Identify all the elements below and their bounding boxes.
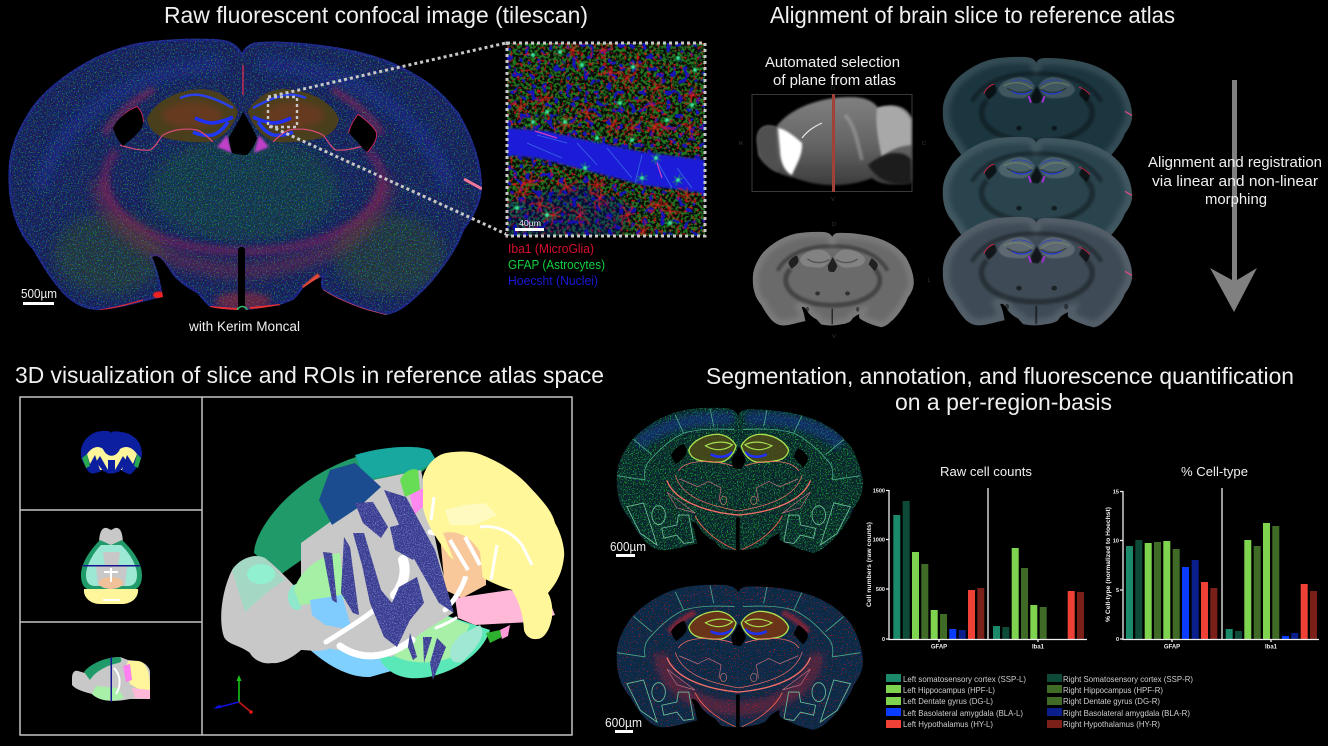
caption: alignment and registration: via linear and non-linear — [1152, 174, 1318, 190]
mid colored regions — [294, 469, 555, 630]
axes — [1120, 488, 1319, 642]
tick labels: 500 — [876, 587, 885, 593]
inset scale bar — [515, 219, 544, 231]
tissue slice ROIs — [323, 490, 454, 680]
title: segmentation: Segmentation, annotation, and fluorescence quantification — [706, 363, 1294, 389]
stain legend: GFAP (Astrocytes) — [508, 257, 605, 272]
3D viewer — [20, 397, 572, 735]
bars — [893, 501, 1084, 639]
main 3D atlas model — [221, 447, 564, 682]
title: raw image: Raw fluorescent confocal image (tilescan) — [164, 2, 588, 28]
atlas sagittal view with plane marker — [739, 86, 931, 340]
zoom connector and source box — [268, 43, 506, 234]
thumbnail: sagittal — [72, 657, 150, 702]
tick labels: 1500 — [873, 488, 885, 494]
region legend — [886, 674, 1193, 729]
orientation axes — [213, 675, 253, 714]
viewer frame — [20, 397, 572, 735]
title: segmentation — [706, 363, 1294, 415]
legend entry: HPF-L: Left Hippocampus (HPF-L) — [903, 685, 995, 695]
orientation letters: V — [831, 197, 835, 203]
tick labels — [1113, 490, 1119, 643]
tick labels: 15 — [1113, 490, 1119, 496]
stain legend: Hoecsht (Nuclei) — [508, 273, 598, 288]
scale bar 600 µm, bottom: 600µm — [605, 716, 642, 730]
cortex teal — [355, 447, 436, 480]
caption: automated selection — [765, 55, 900, 89]
legend entry: BLA-L: Left Basolateral amygdala (BLA-L) — [903, 708, 1023, 718]
tick labels: 0 — [1116, 637, 1119, 643]
title: segmentation: on a per-region-basis — [895, 389, 1112, 415]
thumbnail: horizontal — [81, 528, 142, 604]
tick labels: 1000 — [873, 538, 885, 544]
orientation letters: R — [739, 141, 743, 147]
inset: confocal magnification — [506, 35, 705, 244]
axis label: Cell numbers (raw counts) — [866, 522, 873, 607]
legend entry: BLA-R: Right Basolateral amygdala (BLA-R) — [1063, 708, 1190, 718]
stain legend: Iba1 (MicroGlia) — [508, 241, 594, 256]
legend entry: HPF-R: Right Hippocampus (HPF-R) — [1063, 685, 1163, 695]
inset scale bar: 40µm — [519, 219, 541, 228]
caption: alignment and registration: Alignment and registration — [1148, 155, 1322, 171]
segmented brain: GFAP — [616, 407, 865, 554]
legend entry: HY-R: Right Hypothalamus (HY-R) — [1063, 719, 1160, 729]
aligned brain stack — [943, 57, 1132, 327]
bars — [1126, 523, 1317, 639]
aligned slice: middle — [943, 137, 1132, 247]
group labels: GFAP — [1164, 644, 1180, 650]
legend entry: SSP-R: Right Somatosensory cortex (SSP-R) — [1063, 674, 1193, 684]
group labels: Iba1 — [1265, 644, 1278, 650]
legend entry: DG-L: Left Dentate gyrus (DG-L) — [903, 696, 993, 706]
thumbnail: coronal — [81, 431, 142, 474]
legend entry: SSP-L: Left somatosensory cortex (SSP-L) — [903, 674, 1026, 684]
axis label: % Cell-type (normalized to Hoechst) — [1105, 507, 1112, 622]
credit: with Kerim Moncal — [188, 319, 300, 334]
slice speckle — [324, 490, 454, 678]
stain legend — [508, 241, 605, 288]
tick labels: 0 — [882, 637, 885, 643]
orientation letters: D — [832, 222, 836, 228]
raw coronal brain image — [7, 37, 485, 317]
orientation letters — [739, 86, 931, 340]
midbrain grey — [301, 470, 453, 657]
atlas coronal plane — [753, 232, 914, 327]
arrow: registration progress — [1210, 80, 1257, 312]
scale bar 500 µm: 500µm — [21, 287, 57, 301]
caption: automated selection: of plane from atlas — [773, 73, 896, 89]
cortex green — [254, 448, 436, 575]
scale bar 600 µm, top: 600µm — [610, 540, 646, 554]
orientation letters: C — [922, 141, 926, 147]
slice dark cap — [319, 463, 381, 525]
group labels — [931, 644, 1045, 650]
tick labels — [873, 488, 885, 643]
legend entry: HY-L: Left Hypothalamus (HY-L) — [903, 719, 993, 729]
orientation letters: V — [832, 334, 836, 340]
group labels: Iba1 — [1032, 644, 1045, 650]
aligned slice: bottom — [943, 217, 1132, 327]
cerebellum yellow — [423, 452, 564, 639]
caption: automated selection: Automated selection — [765, 55, 900, 71]
cerebellum details — [431, 497, 532, 580]
chart title: Raw cell counts — [940, 464, 1032, 479]
caption: alignment and registration: morphing — [1205, 192, 1267, 208]
chart: raw cell counts — [866, 464, 1087, 650]
caption: alignment and registration — [1148, 155, 1322, 208]
tick labels: 10 — [1113, 538, 1119, 544]
white fiber tracts — [326, 532, 470, 656]
group labels: GFAP — [931, 644, 947, 650]
axes — [886, 488, 1087, 642]
legend entry: DG-R: Right Dentate gyrus (DG-R) — [1063, 696, 1160, 706]
olfactory grey — [221, 556, 340, 663]
chart: percent cell type — [1105, 464, 1319, 650]
tick labels: 5 — [1116, 588, 1119, 594]
chart title: % Cell-type — [1181, 464, 1248, 479]
orientation letters: L — [927, 278, 931, 284]
ventral regions — [305, 610, 510, 678]
title: alignment: Alignment of brain slice to reference atlas — [770, 2, 1175, 28]
title: 3D visualization: 3D visualization of slice and ROIs in reference atlas space — [15, 362, 604, 388]
orientation letters: D — [831, 86, 835, 92]
aligned slice: top — [943, 57, 1132, 167]
segmented brain: Iba1 — [616, 584, 865, 731]
group labels — [1164, 644, 1278, 650]
